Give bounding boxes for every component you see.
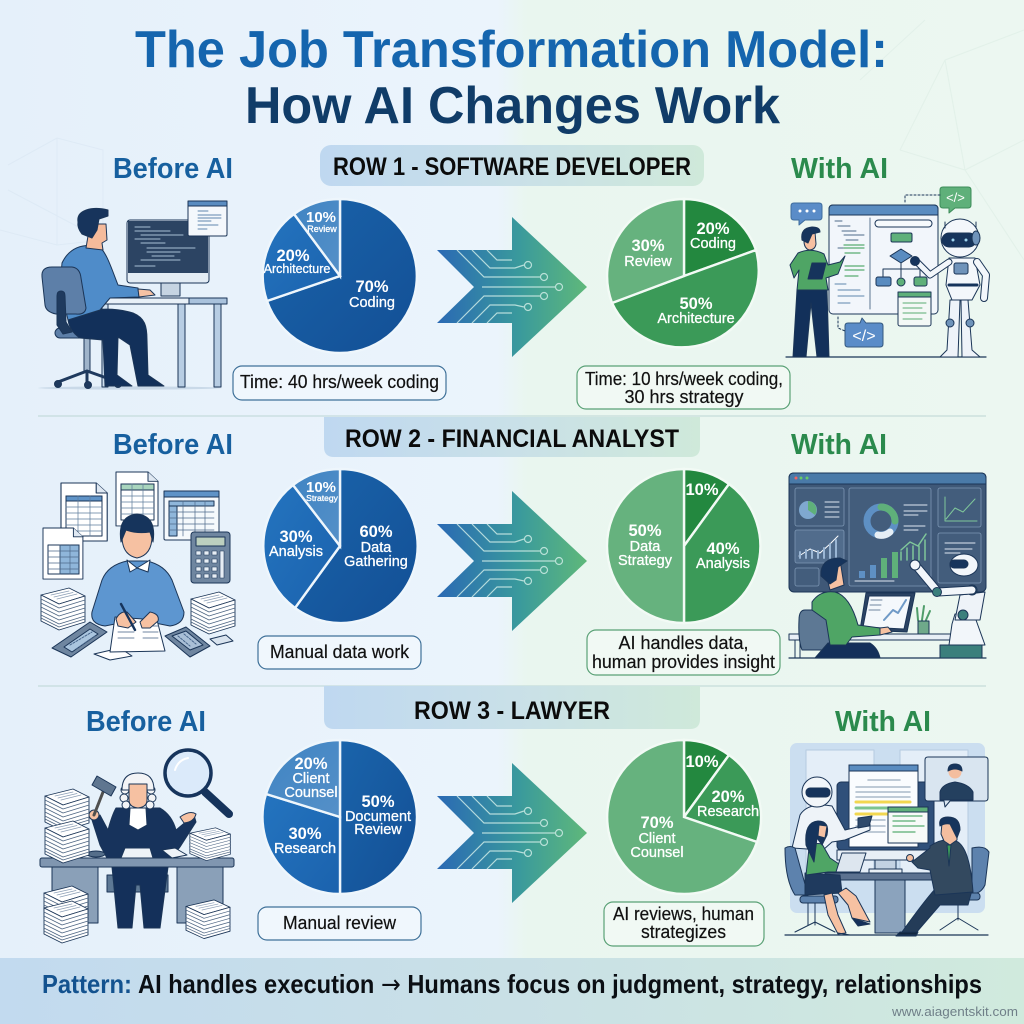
man with tablet: [790, 227, 845, 357]
paper stacks: [41, 588, 235, 634]
pattern statement: AI handles execution → Humans focus on judgment, strategy, relationships: [138, 969, 982, 1000]
pie chart: lawyer with AI: [607, 740, 761, 894]
row 3 callout with AI: [604, 902, 764, 946]
pie labels: Research: [274, 841, 336, 857]
pie labels: 20%: [696, 220, 730, 238]
head: [78, 208, 108, 250]
pie labels: Review: [354, 822, 402, 838]
hand: [138, 289, 155, 297]
pie labels: Strategy: [618, 553, 673, 569]
row 1 callout with AI: Time: 10 hrs/week coding,: [585, 369, 783, 389]
pattern label: Pattern:: [42, 969, 132, 999]
magnifier: [165, 750, 229, 814]
legs: [68, 309, 164, 386]
pie labels: [274, 755, 411, 857]
pie labels: Counsel: [284, 785, 338, 801]
row 2 callout before: Manual data work: [270, 642, 410, 662]
desk: [100, 298, 227, 387]
pie labels: Strategy: [306, 493, 339, 503]
row 2 with label: With AI: [791, 429, 887, 461]
row 1 callout with AI: [577, 366, 790, 409]
illustration: lawyer with AI meeting: [785, 743, 989, 936]
pie chart: analyst before: [263, 469, 418, 623]
row 3 callout with AI: strategizes: [641, 922, 726, 942]
row 1 with label: With AI: [791, 153, 888, 185]
robot: [910, 554, 985, 658]
pie labels: Document: [345, 809, 411, 825]
pie labels: Review: [624, 254, 672, 270]
windows: [806, 750, 968, 880]
review document: [849, 765, 918, 847]
chair: [799, 610, 840, 650]
torso: [61, 245, 139, 320]
blue chat bubble: [791, 203, 822, 225]
laptop: [860, 593, 915, 632]
footer band: [0, 958, 1024, 1024]
pie labels: 20%: [276, 247, 310, 265]
pie labels: 10%: [685, 753, 719, 771]
pie labels: Data: [630, 539, 661, 555]
row 1 heading: [320, 145, 704, 186]
arrow row 2: [437, 491, 587, 631]
pie labels: 60%: [359, 523, 393, 541]
pie labels: 10%: [306, 209, 336, 226]
row 1 before label: Before AI: [113, 153, 233, 185]
title: [135, 21, 888, 135]
green code bubble: [940, 187, 971, 213]
pie labels: Coding: [690, 236, 736, 252]
background polygons: [0, 20, 1024, 260]
office backdrop: [790, 743, 985, 913]
paper stacks: [44, 789, 230, 943]
row 1 callout before: Time: 40 hrs/week coding: [240, 372, 439, 392]
website: www.aiagentskit.com: [891, 1004, 1018, 1019]
code popup: [188, 201, 227, 236]
chair seat and base: [54, 328, 122, 388]
analyst body: [92, 514, 184, 660]
chair back and desk: [40, 848, 234, 923]
lawyer legs: [112, 867, 168, 928]
pie labels: 30%: [288, 825, 322, 843]
bottom calculators: [52, 622, 233, 657]
row 2 callout with AI: human provides insight: [592, 652, 775, 672]
pie labels: Coding: [349, 295, 395, 311]
row 3 callout before: Manual review: [283, 913, 397, 933]
row 2 heading: ROW 2 - FINANCIAL ANALYST: [345, 425, 679, 453]
pie chart: developer before: [263, 199, 417, 353]
robot: [910, 219, 986, 357]
row 2 heading: [324, 417, 700, 457]
pie labels: Counsel: [630, 845, 684, 861]
row 2 before label: Before AI: [113, 429, 233, 461]
small window: [888, 807, 928, 843]
monitor: [837, 782, 934, 873]
row 3 heading: [324, 686, 700, 729]
chair back: [42, 267, 86, 334]
pie labels: 70%: [640, 814, 674, 832]
spreadsheets: [43, 472, 219, 579]
video call window: [925, 757, 988, 807]
pie chart: lawyer before: [262, 740, 417, 894]
blue code bubble: </>: [852, 328, 876, 345]
dividers: [38, 416, 986, 686]
pie labels: Analysis: [696, 556, 750, 572]
pie labels: 30%: [279, 528, 313, 546]
row 2 callout with AI: AI handles data,: [618, 633, 749, 653]
table: [825, 873, 945, 933]
row 3 callout before: [258, 907, 421, 940]
pie labels: [269, 479, 408, 570]
arrow row 3: [437, 763, 587, 903]
pie labels: 20%: [711, 788, 745, 806]
flow board: [829, 205, 938, 326]
robot: [792, 777, 872, 850]
pie labels: 70%: [355, 278, 389, 296]
pie labels: 10%: [685, 481, 719, 499]
pie labels: 40%: [706, 540, 740, 558]
pie labels: 10%: [306, 479, 336, 496]
pie labels: Gathering: [344, 554, 408, 570]
pie labels: Client: [292, 771, 330, 787]
green code bubble: </>: [946, 190, 965, 205]
pie labels: [624, 220, 736, 327]
monitor: [127, 220, 209, 296]
lawyer upper body: [89, 773, 196, 860]
pie labels: [264, 209, 395, 311]
pie labels: Research: [697, 804, 759, 820]
desk and ground: [789, 634, 986, 658]
man: [896, 817, 973, 936]
illustration: developer with robot: [786, 187, 986, 357]
row 3 with label: With AI: [835, 706, 931, 738]
person: [812, 558, 892, 658]
row 1 callout with AI: 30 hrs strategy: [624, 387, 744, 407]
dashboard: [789, 473, 986, 592]
pie chart: analyst with AI: [607, 469, 760, 623]
row 2 callout with AI: [587, 630, 780, 675]
arrow row 1: [437, 217, 587, 357]
illustration: analyst with paperwork: [41, 472, 235, 660]
illustration: analyst with dashboard and robot: [789, 473, 986, 658]
pie labels: 50%: [679, 295, 713, 313]
title line 1: The Job Transformation Model:: [135, 21, 888, 79]
pie labels: 20%: [294, 755, 328, 773]
pie labels: Client: [638, 831, 676, 847]
pie labels: Analysis: [269, 544, 323, 560]
dashed connectors: [838, 195, 940, 331]
chairs: [785, 846, 989, 932]
plant: [917, 606, 930, 634]
row 3 heading: ROW 3 - LAWYER: [414, 697, 610, 725]
row 2 callout before: [258, 636, 421, 669]
row 3 before label: Before AI: [86, 706, 206, 738]
pie labels: 50%: [361, 793, 395, 811]
blue code bubble: [845, 318, 883, 347]
pie chart: developer with AI: [607, 199, 759, 347]
woman: [805, 821, 870, 935]
pie labels: Review: [307, 224, 337, 234]
pie labels: [630, 753, 759, 861]
illustration: lawyer at desk: [40, 750, 234, 943]
illustration: developer at desk: [38, 201, 227, 390]
pie labels: 50%: [628, 522, 662, 540]
pie labels: Architecture: [264, 262, 330, 276]
title line 2: How AI Changes Work: [245, 77, 780, 135]
ground line: [785, 934, 988, 936]
row 1 callout before: [233, 366, 446, 400]
calculator: [191, 532, 230, 583]
ground line: [786, 356, 986, 358]
pie labels: 30%: [631, 237, 665, 255]
row 3 callout with AI: AI reviews, human: [613, 904, 754, 924]
row 1 heading: ROW 1 - SOFTWARE DEVELOPER: [333, 153, 691, 181]
pie labels: Architecture: [657, 311, 735, 327]
pie labels: [618, 481, 750, 572]
pie labels: Data: [361, 540, 392, 556]
